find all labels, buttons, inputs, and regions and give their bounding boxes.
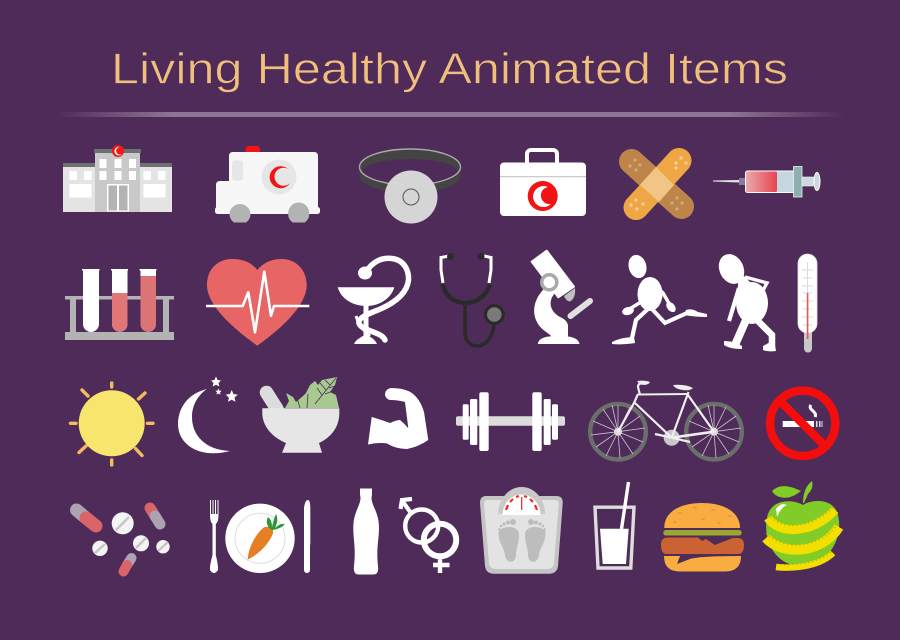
- icon: bathroom weighing scale: [480, 487, 563, 574]
- icon: crescent moon and stars: [178, 376, 238, 453]
- icon: bicycle: [590, 381, 742, 460]
- icon: stethoscope: [441, 253, 505, 346]
- icon: male and female symbols: [400, 499, 456, 573]
- icon: green apple with measuring tape: [766, 481, 839, 568]
- icon: flexed arm: [368, 388, 428, 449]
- icon: dumbbell: [456, 392, 565, 451]
- icon: hospital: [63, 145, 172, 212]
- icon: bowl of Hygieia: [338, 258, 409, 344]
- icon: test tubes in rack: [65, 269, 174, 340]
- icon: pills and capsules: [76, 508, 170, 572]
- icon: mortar and pestle with herbs: [262, 377, 339, 453]
- icon: first aid kit: [500, 150, 586, 216]
- icon: running figure: [612, 253, 707, 344]
- icon: crossed bandages: [628, 156, 688, 211]
- icon: ambulance: [215, 146, 320, 222]
- icon: syringe: [713, 166, 820, 197]
- icon: soda bottle: [353, 488, 379, 574]
- icon: hamburger: [661, 503, 744, 572]
- icon: glass of milk with straw: [595, 482, 634, 568]
- icon: no smoking sign: [770, 391, 835, 456]
- icon: microscope: [532, 251, 590, 344]
- icon: plate with carrot, fork and knife: [210, 500, 310, 573]
- icon: overweight walking figure: [714, 250, 776, 351]
- icon: head mirror: [360, 148, 460, 224]
- icon: heart with pulse: [206, 259, 309, 346]
- icon: thermometer: [798, 254, 817, 352]
- icon: sun: [70, 383, 153, 465]
- title: Living Healthy Animated Items: [111, 44, 788, 94]
